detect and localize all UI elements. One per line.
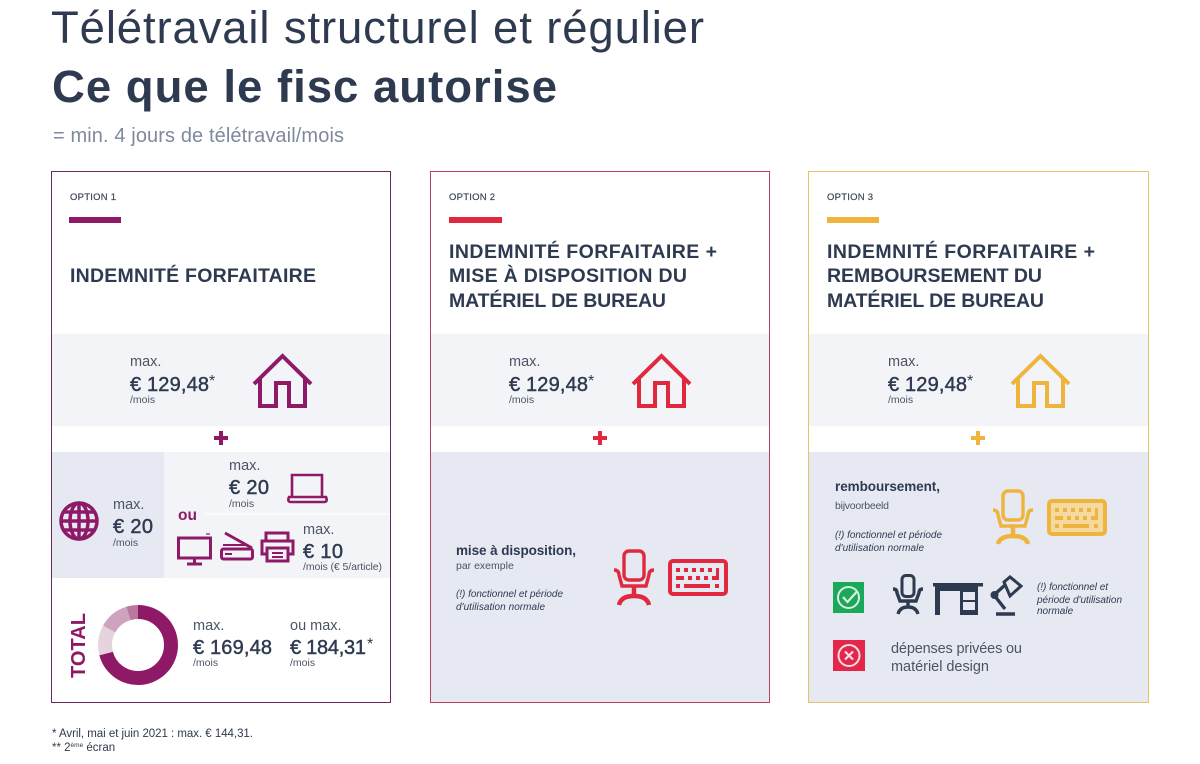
amount: total: max. xyxy=(193,618,224,634)
donut chart xyxy=(105,612,171,678)
amount: flat rate: max. xyxy=(130,354,161,370)
icon: green check xyxy=(833,582,864,613)
amount: flat rate: max. xyxy=(888,354,919,370)
accent bar xyxy=(69,217,121,223)
panel: option 2 xyxy=(430,172,770,702)
amount: flat rate xyxy=(509,354,594,406)
amount: total alternative: /mois xyxy=(290,657,315,669)
amount: total alternative: ou max. xyxy=(290,618,342,634)
text: exclusions: matériel design xyxy=(891,659,989,675)
amount: flat rate: € 129,48 xyxy=(888,374,967,396)
icon: laptop xyxy=(288,475,327,502)
heading: MATÉRIEL DE BUREAU xyxy=(827,289,1044,312)
text: provision xyxy=(456,543,576,613)
amount: internet: € 20 xyxy=(113,516,153,538)
text: exclusions xyxy=(891,641,1022,675)
amount: total xyxy=(193,618,272,669)
title: Ce que le fisc autorise xyxy=(52,61,557,112)
note: usage conditions xyxy=(1036,582,1122,617)
plus sign xyxy=(593,431,607,445)
panel: option 3 xyxy=(808,172,1148,702)
amount: flat rate: /mois xyxy=(509,394,534,406)
plus sign xyxy=(214,431,228,445)
note: usage conditions: normale xyxy=(1037,606,1074,617)
amount: laptop: max. xyxy=(229,458,260,474)
icon: red cross xyxy=(833,640,865,671)
amount: flat rate: /mois xyxy=(130,394,155,406)
total label: TOTAL xyxy=(68,613,90,678)
amount: total alternative: € 184,31 xyxy=(290,637,366,659)
heading: INDEMNITÉ FORFAITAIRE + xyxy=(449,240,717,263)
option label: OPTION 2 xyxy=(449,192,495,203)
note: usage conditions: période d'utilisation xyxy=(1036,595,1122,606)
amount: laptop xyxy=(229,458,269,510)
amount: flat rate: * xyxy=(588,373,594,390)
amount: total: € 169,48 xyxy=(193,637,272,659)
amount: total alternative xyxy=(290,618,373,669)
amount: flat rate: /mois xyxy=(888,394,913,406)
text: reimbursement: d'utilisation normale xyxy=(835,543,924,554)
amount: flat rate xyxy=(130,354,215,406)
amount: flat rate: € 129,48 xyxy=(509,374,588,396)
heading xyxy=(827,240,1095,312)
amount: flat rate xyxy=(888,354,973,406)
icon: office chair xyxy=(614,551,654,605)
amount: laptop: € 20 xyxy=(229,477,269,499)
text: ou: ou xyxy=(178,507,197,524)
title: Télétravail structurel et régulier xyxy=(51,2,704,53)
heading: MISE À DISPOSITION DU xyxy=(449,264,687,287)
amount: flat rate: max. xyxy=(509,354,540,370)
footnotes: ** 2 xyxy=(52,742,71,754)
amount: peripherals: /mois (€ 5/article) xyxy=(303,561,382,573)
amount: internet xyxy=(113,497,153,549)
panel: option 1 xyxy=(52,172,390,702)
heading: MATÉRIEL DE BUREAU xyxy=(449,289,666,312)
footnotes xyxy=(52,728,253,754)
title xyxy=(51,2,704,112)
amount: peripherals: € 10 xyxy=(303,541,343,563)
option label: OPTION 1 xyxy=(70,192,116,203)
text: provision: par exemple xyxy=(456,560,514,572)
icon: desk lamp xyxy=(992,577,1021,614)
footnotes: ème xyxy=(71,742,84,749)
amount: laptop: /mois xyxy=(229,498,254,510)
icon: globe xyxy=(61,503,97,539)
amount: internet: /mois xyxy=(113,537,138,549)
subtitle: = min. 4 jours de télétravail/mois xyxy=(53,125,344,147)
text: reimbursement xyxy=(835,479,942,554)
icon: keyboard xyxy=(1049,501,1105,534)
heading xyxy=(449,240,717,312)
icon: house xyxy=(1012,356,1069,406)
icon: office chair xyxy=(993,491,1033,544)
icon: house xyxy=(254,356,311,406)
icon: monitor xyxy=(178,534,210,564)
icon: house xyxy=(633,356,690,406)
plus sign xyxy=(971,431,985,445)
amount: flat rate: € 129,48 xyxy=(130,374,209,396)
text: provision: mise à disposition, xyxy=(456,543,576,558)
accent bar xyxy=(827,217,879,223)
heading: INDEMNITÉ FORFAITAIRE xyxy=(70,264,316,287)
icon: scanner xyxy=(222,533,252,559)
footnotes: * Avril, mai et juin 2021 : max. € 144,31. xyxy=(52,728,253,740)
amount: peripherals: max. xyxy=(303,522,334,538)
heading: INDEMNITÉ FORFAITAIRE + xyxy=(827,240,1095,263)
amount: peripherals xyxy=(303,522,382,573)
amount: internet: max. xyxy=(113,497,144,513)
icon: desk xyxy=(933,583,983,615)
text: reimbursement: bijvoorbeeld xyxy=(835,500,889,512)
amount: total: /mois xyxy=(193,657,218,669)
amount: total alternative: * xyxy=(367,636,373,653)
text: provision: (!) fonctionnel et période xyxy=(456,589,563,600)
icon: keyboard xyxy=(670,561,726,594)
heading: REMBOURSEMENT DU xyxy=(827,265,1042,287)
option label: OPTION 3 xyxy=(827,192,873,203)
icon: dark chair xyxy=(893,576,923,614)
accent bar xyxy=(449,217,502,223)
text: reimbursement: (!) fonctionnel et période xyxy=(835,530,942,541)
text: reimbursement: remboursement, xyxy=(835,479,940,494)
text: provision: d'utilisation normale xyxy=(456,602,545,613)
amount: flat rate: * xyxy=(967,373,973,390)
footnotes: écran xyxy=(83,742,115,754)
text: exclusions: dépenses privées ou xyxy=(891,641,1022,657)
note: usage conditions: (!) fonctionnel et xyxy=(1037,582,1109,593)
icon: printer xyxy=(262,533,293,561)
amount: flat rate: * xyxy=(209,373,215,390)
